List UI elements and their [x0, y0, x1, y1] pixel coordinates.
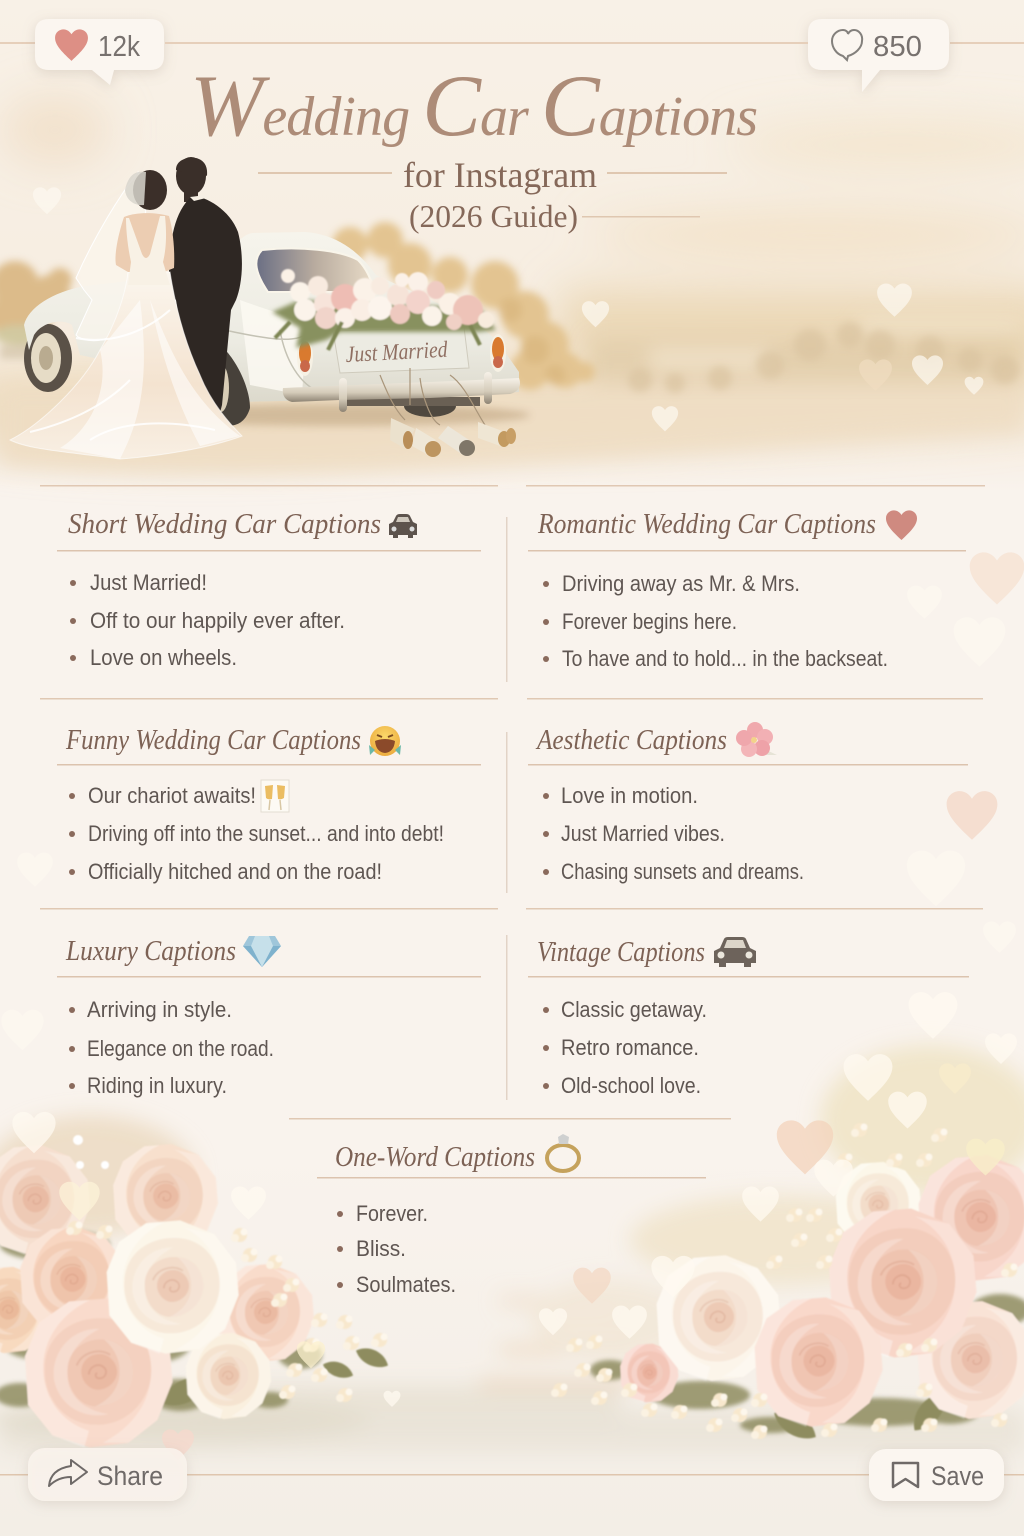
caption list: Elegance on the road. — [87, 1036, 274, 1061]
share button: Share — [97, 1461, 163, 1491]
hero illustration: vintage wedding car — [24, 232, 530, 457]
horizon shrubs — [628, 322, 1019, 393]
bride's veil comb — [125, 172, 146, 205]
just married sign — [333, 327, 469, 373]
subtitle: for Instagram — [403, 155, 597, 195]
caption list — [69, 997, 274, 1098]
bride's veil — [76, 172, 146, 341]
bride's dress — [10, 272, 242, 459]
rear tyre — [213, 340, 456, 426]
caption list: Riding in luxury. — [87, 1073, 227, 1098]
caption list: Retro romance. — [561, 1035, 699, 1060]
social badge: comments — [808, 19, 1024, 92]
icon: diamond ring — [547, 1134, 579, 1171]
caption list — [69, 783, 444, 884]
caption list — [337, 1201, 456, 1297]
floating hearts — [1, 187, 1024, 1050]
share button — [28, 1448, 187, 1501]
icon: pink flower — [736, 722, 777, 757]
caption list: Driving away as Mr. & Mrs. — [562, 571, 800, 596]
caption list: Just Married vibes. — [561, 821, 725, 846]
caption list — [543, 571, 888, 671]
heading: Short Wedding Car Captions — [68, 508, 381, 540]
panel: one-word captions — [317, 1134, 706, 1297]
heading: Funny Wedding Car Captions — [65, 724, 361, 756]
bottom watercolor wash — [0, 1045, 1024, 1452]
heading: Romantic Wedding Car Captions — [537, 508, 876, 540]
save button: Save — [931, 1461, 984, 1491]
caption list: Love in motion. — [561, 783, 698, 808]
caption list: Arriving in style. — [87, 997, 232, 1022]
caption list: Forever begins here. — [562, 609, 737, 634]
rose bouquet: right — [590, 1155, 1024, 1446]
rose bouquet: left — [0, 1144, 391, 1447]
panel: vintage captions — [528, 936, 969, 1098]
social badge: comments: 850 — [873, 31, 922, 63]
icon: heart — [886, 510, 917, 540]
caption list — [543, 783, 804, 884]
title: Wedding Car Captions — [190, 58, 758, 155]
caption list: To have and to hold... in the backseat. — [562, 646, 888, 671]
social badge: likes: 12k — [98, 31, 140, 63]
icon: laughing emoji — [369, 726, 401, 756]
caption list: Love on wheels. — [90, 645, 237, 670]
caption list: Old-school love. — [561, 1073, 701, 1098]
bumper — [283, 372, 520, 412]
caption list — [70, 570, 345, 670]
subtitle: (2026 Guide) — [409, 198, 578, 234]
rear window — [256, 248, 374, 292]
baby's breath: right — [551, 1123, 1018, 1439]
caption list: Soulmates. — [356, 1272, 456, 1297]
car body — [24, 232, 519, 402]
icon: car — [389, 514, 417, 538]
bride's hair — [133, 170, 167, 210]
caption list: Our chariot awaits! — [88, 783, 256, 808]
bride's bodice — [126, 216, 170, 285]
icon: diamond — [243, 936, 281, 967]
icon: share arrow — [49, 1460, 87, 1486]
panel: funny wedding car captions — [57, 724, 481, 884]
tin cans — [380, 368, 516, 457]
subtitle — [258, 155, 727, 234]
heading: Luxury Captions — [65, 935, 236, 967]
caption list: Bliss. — [356, 1236, 406, 1261]
heading: One-Word Captions — [335, 1141, 535, 1173]
save button — [869, 1449, 1004, 1501]
panel dividers — [40, 485, 985, 1120]
tail lights — [297, 334, 506, 376]
foliage blobs: behind car — [332, 222, 595, 390]
groom — [169, 157, 242, 428]
bride's back — [115, 213, 174, 272]
caption list: Off to our happily ever after. — [90, 608, 345, 633]
footer rule — [0, 1474, 1024, 1476]
bouquet on trunk — [272, 269, 496, 350]
hero illustration: bride and groom — [10, 157, 242, 459]
heading: Vintage Captions — [537, 936, 705, 968]
caption list: Forever. — [356, 1201, 428, 1226]
heading: Aesthetic Captions — [535, 724, 727, 756]
caption list: Just Married! — [90, 570, 207, 595]
just married sign: Just Married — [345, 337, 449, 367]
caption list: Officially hitched and on the road! — [88, 859, 382, 884]
panel: romantic wedding car captions — [528, 508, 966, 671]
baby's breath: left — [66, 1135, 388, 1402]
icon: champagne glasses — [261, 780, 289, 812]
caption list — [543, 997, 707, 1098]
icon: bookmark — [893, 1463, 918, 1487]
hero sunset scenery — [0, 95, 1024, 473]
panel: luxury captions — [57, 935, 481, 1098]
floating hearts over flowers — [12, 992, 1017, 1460]
social badge: likes — [0, 19, 164, 85]
caption list: Classic getaway. — [561, 997, 707, 1022]
icon: vintage car — [714, 937, 756, 967]
panel: short wedding car captions — [57, 508, 481, 670]
car shadow — [150, 404, 530, 426]
caption list: Driving off into the sunset... and into debt! — [88, 821, 444, 846]
foliage blobs: left — [0, 261, 72, 337]
panel: aesthetic captions — [528, 722, 968, 884]
caption list: Chasing sunsets and dreams. — [561, 859, 804, 884]
front wheel — [24, 324, 72, 392]
